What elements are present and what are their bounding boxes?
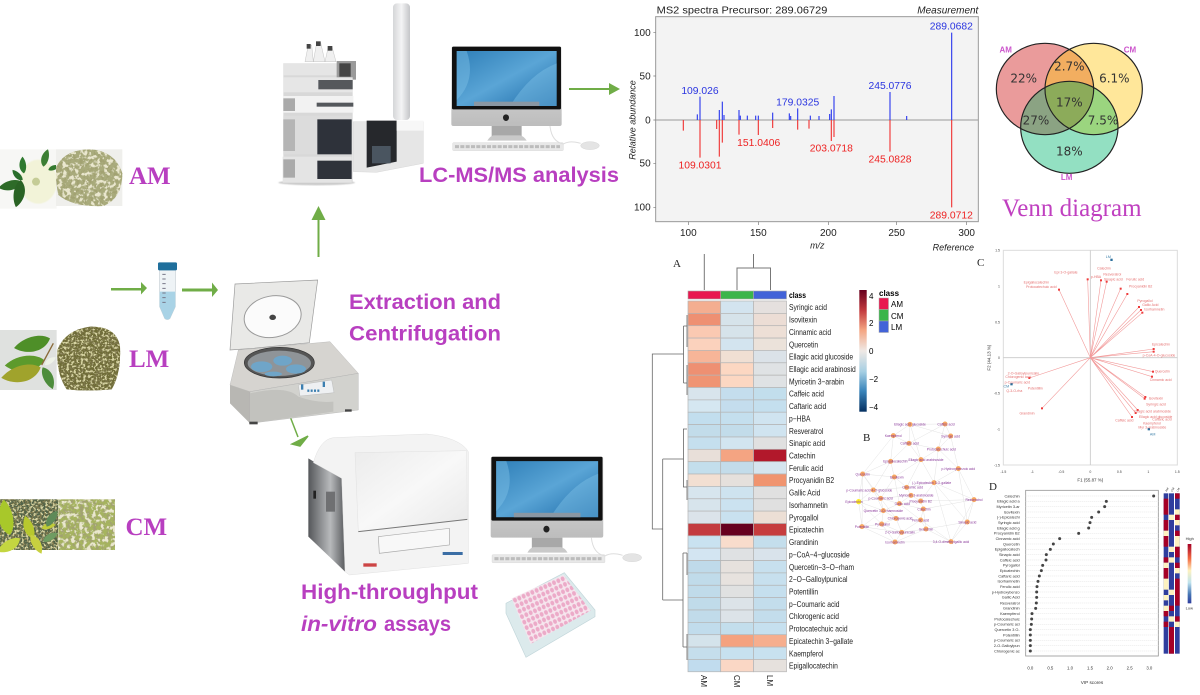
axis ticks: -1.5	[994, 463, 1000, 467]
VIP compound labels: Caftaric acid	[998, 574, 1020, 578]
y axis title: Relative abundance	[627, 80, 637, 160]
icon: 96-well plate	[506, 573, 595, 657]
network node labels: Grandinin	[919, 527, 933, 531]
network node labels: Protocatechuic acid	[927, 447, 956, 451]
axis ticks: -0.5	[994, 392, 1000, 396]
observation labels	[1003, 255, 1155, 436]
column labels	[699, 675, 774, 688]
VIP x axis labels: 2.0	[1107, 666, 1113, 671]
network node labels: Potentillin	[855, 525, 869, 529]
network node labels: Isorhamnetin	[885, 540, 905, 544]
loading labels: Quercetin	[1155, 370, 1170, 374]
heatmap cells	[688, 301, 786, 672]
axis ticks: 1.5	[995, 249, 1000, 253]
VIP compound labels: Gallic Acid	[1002, 596, 1020, 600]
network node labels: Pyrogallol	[875, 522, 890, 526]
VIP class strip	[1164, 493, 1180, 654]
network node labels: Quercetin	[855, 472, 870, 476]
VIP compound labels: Pyrogallol	[1003, 564, 1020, 568]
network node labels: Procyanidin B2	[909, 499, 932, 503]
blue peak labels: 245.0776	[868, 81, 912, 92]
red peak labels	[678, 138, 973, 221]
VIP compound labels: Kaempferol	[1000, 612, 1020, 616]
photo: LM fresh leaves	[0, 330, 58, 391]
panel label D: D	[989, 481, 997, 493]
loading labels: Isovitexin	[1149, 397, 1163, 401]
axis ticks: -0.5	[1058, 470, 1064, 474]
column labels: CM	[732, 675, 741, 688]
Venn set labels	[999, 45, 1137, 182]
compound row labels: Quercetin	[789, 340, 818, 349]
panel label B: B	[863, 432, 870, 444]
loading labels: Isorhamnetin	[1144, 308, 1164, 312]
loading labels: Resveratrol	[1103, 273, 1121, 277]
compound row labels: Catechin	[789, 451, 815, 461]
axis ticks: 0	[998, 356, 1000, 360]
compound row labels: Resveratrol	[789, 426, 824, 436]
heading: High-throughput in-vitro assays	[301, 581, 478, 636]
network node labels: Ellagic acid glucoside	[894, 423, 926, 427]
loading labels: Gallic Acid	[1142, 303, 1159, 307]
spectrum title: MS2 spectra Precursor: 289.06729	[657, 5, 828, 16]
axis ticks	[994, 249, 1180, 474]
Venn percentages: 6.1%	[1099, 71, 1130, 85]
VIP compound labels: Sinapic acid	[999, 553, 1020, 557]
column labels: LM	[765, 675, 774, 686]
network node labels: p-Coumaric acid 4-O-glucoside	[846, 488, 892, 492]
VIP compound labels: Resveratrol	[1000, 601, 1020, 605]
compound row labels: Epigallocatechin	[789, 661, 838, 671]
network node labels: Isovitexin	[890, 475, 904, 479]
Venn percentages: 18%	[1056, 144, 1083, 158]
blue peak labels: 289.0682	[930, 22, 973, 33]
network node labels: Chlorogenic acid	[888, 517, 913, 521]
loading labels: Epigallocatechin	[1024, 281, 1049, 285]
network node labels: Ellagic acid arabinoside	[909, 458, 944, 462]
axis ticks: -1	[1031, 470, 1034, 474]
network node labels: Caffeic acid	[937, 423, 955, 427]
VIP compound labels: Procyanidin B2	[994, 532, 1020, 536]
compound row labels: p−Coumaric acid	[789, 599, 840, 609]
class legend: AM	[891, 300, 903, 309]
blue peak labels: 179.0325	[776, 97, 819, 108]
network nodes	[856, 422, 976, 544]
compound row labels: Epicatechin	[789, 525, 824, 535]
VIP compound labels: Chlorogenic ac	[994, 649, 1020, 653]
compound row labels: Syringic acid	[789, 303, 827, 312]
network node labels: p-Hydroxybenzoic acid	[941, 467, 975, 471]
loading labels: Grandinin	[1019, 411, 1035, 415]
x axis tick labels: 150	[750, 228, 767, 239]
x axis tick labels: 250	[888, 228, 905, 239]
compound row labels: Caffeic acid	[789, 389, 824, 399]
panel label C: C	[977, 257, 984, 269]
VIP compound labels: Myricetin 3-ar	[996, 505, 1020, 509]
class legend: CM	[891, 312, 904, 321]
loading labels: Kaempferol	[1143, 421, 1161, 425]
y axis tick labels: 100	[634, 28, 651, 39]
icon: computer (LC-MS)	[451, 47, 599, 151]
compound row labels: Ellagic acid arabinosid	[789, 364, 856, 374]
y axis tick labels: 50	[640, 72, 651, 83]
VIP compound labels: Ferulic acid	[1000, 585, 1020, 589]
axis ticks: -1	[997, 428, 1000, 432]
photo: AM dried leaves	[56, 149, 122, 206]
compound row labels: Gallic Acid	[789, 488, 820, 498]
red peak labels: 151.0406	[737, 138, 780, 149]
VIP compound labels: (-)-Epicatechi	[997, 516, 1020, 520]
y axis tick labels: 50	[640, 159, 651, 170]
compound row labels: Procyanidin B2	[789, 476, 834, 485]
observation labels: CM	[1003, 385, 1009, 389]
chart: PCA biplot C	[986, 249, 1180, 483]
loading vectors	[1029, 279, 1154, 417]
loading labels: Ellagic acid glucoside	[1139, 415, 1172, 419]
axis ticks: -1.5	[1000, 470, 1006, 474]
heading: LC-MS/MS analysis: LC-MS/MS analysis	[419, 164, 619, 187]
compound row labels: Caftaric acid	[789, 402, 826, 411]
heading: Extraction and Centrifugation	[349, 291, 501, 346]
VIP compound labels: Epigallocatech	[995, 548, 1020, 552]
loading labels: Protocatechuic acid	[1026, 285, 1057, 289]
colour scale	[859, 290, 879, 412]
Venn set labels: AM	[999, 46, 1012, 55]
red peak labels: 289.0712	[930, 210, 973, 221]
arrow: centrifuge down to plate reader	[290, 415, 308, 446]
compound row labels: Myricetin 3−arabin	[789, 377, 844, 387]
reference label: Reference	[933, 243, 974, 253]
loading labels: Ellagic acid arabinoside	[1134, 410, 1171, 414]
compound row labels: Pyrogallol	[789, 513, 819, 522]
colour scale: −2	[869, 375, 879, 384]
panel label A: A	[673, 258, 681, 270]
arrow: computer to spectra	[569, 83, 620, 95]
column labels: AM	[699, 675, 708, 687]
chart: compound network B	[845, 422, 983, 544]
compound row labels: 2−O−Galloylpunical	[789, 575, 848, 584]
colour scale: 4	[869, 292, 874, 301]
network node labels: 3,4-O-dimethylgallic acid	[933, 540, 969, 544]
axis ticks: 1.5	[1175, 470, 1180, 474]
loading labels: Myr 3-arabinoside	[1138, 425, 1166, 429]
label: LM: LM	[129, 346, 169, 373]
VIP x axis labels: 2.5	[1127, 666, 1133, 671]
compound row labels: Quercetin−3−O−rham	[789, 562, 854, 572]
Venn percentages: 27%	[1023, 113, 1049, 127]
loading labels: Q-3-O-rha	[1006, 389, 1022, 393]
axis ticks: 0.5	[995, 320, 1000, 324]
VIP strip headers: AM	[1164, 486, 1170, 492]
sample LM: plant photos	[0, 327, 120, 391]
axis ticks: 0	[1089, 470, 1091, 474]
VIP x axis labels: 3.0	[1146, 666, 1153, 671]
network node labels	[845, 423, 983, 544]
chart: MS2 mirror spectrum	[627, 5, 980, 253]
compound row labels: Protocatechuic acid	[789, 624, 848, 634]
Venn set labels: LM	[1061, 173, 1073, 182]
network node labels: Ferulic acid	[912, 518, 929, 522]
axis titles: F1 (55.87 %)	[1077, 478, 1104, 483]
colour scale: −4	[869, 403, 879, 412]
x axis tick labels: 300	[958, 228, 975, 239]
loading labels: Epicatechin	[1152, 343, 1170, 347]
compound row labels: p−HBA	[789, 414, 811, 424]
y axis tick labels: 0	[645, 115, 651, 126]
network node labels: p-Coumaric acid	[869, 497, 893, 501]
VIP compound labels: Ellagic acid g	[997, 526, 1020, 530]
VIP compound labels: Caffeic acid	[1000, 558, 1020, 562]
heading: High-throughput in-vitro assays: in-vitro	[301, 613, 377, 636]
compound row labels	[789, 303, 856, 671]
photo: CM dried leaves	[58, 499, 115, 550]
VIP compound labels: Quercetin	[1003, 542, 1020, 546]
axis ticks: 1	[1147, 470, 1149, 474]
loading labels: Potentillin	[1028, 387, 1043, 391]
red peak labels: 109.0301	[678, 161, 722, 172]
VIP compound labels: Quercetin 3 O-	[995, 628, 1020, 632]
compound row labels: Sinapic acid	[789, 439, 825, 448]
red peak labels: 203.0718	[810, 143, 853, 154]
network node labels: Catechin	[917, 507, 931, 511]
top dendrogram	[704, 254, 770, 290]
network node labels: Gallic acid	[895, 502, 910, 506]
loading labels: Chlorogenic acid	[1005, 375, 1031, 379]
chart: heatmap A	[652, 254, 904, 688]
photo: LM dried leaves	[57, 327, 120, 390]
loading points	[1028, 278, 1155, 418]
heading: High-throughput in-vitro assays: assays	[384, 613, 451, 636]
x axis tick labels: 100	[680, 228, 697, 239]
instrument: LC-MS system	[278, 3, 423, 185]
colour scale: 0	[869, 347, 874, 356]
tall column	[393, 3, 410, 120]
compound row labels: Chlorogenic acid	[789, 612, 839, 621]
blue peak labels: 109.026	[681, 86, 719, 97]
compound row labels: Isorhamnetin	[789, 500, 828, 510]
network node labels: (-)-Epicatechin 3-O-gallate	[912, 481, 951, 485]
observation labels: LM	[1106, 255, 1111, 259]
compound row labels: p−CoA−4−glucoside	[789, 550, 850, 560]
loading labels: 2-O-Galloylpunicalin	[1008, 371, 1039, 375]
Venn percentages: 22%	[1010, 71, 1037, 85]
measurement peaks (blue)	[697, 33, 952, 120]
chart: VIP scores D	[992, 486, 1194, 685]
heading: Venn diagram: Venn diagram	[1002, 195, 1142, 222]
VIP compound labels: Isovitexin	[1004, 510, 1020, 514]
loading labels: Ferulic acid	[1126, 277, 1144, 281]
VIP x axis labels: 1.5	[1087, 666, 1094, 671]
loading labels: Cinnamic acid	[1150, 378, 1172, 382]
reference peaks (red)	[683, 120, 952, 207]
compound row labels: Isovitexin	[789, 315, 817, 325]
VIP colour key: High	[1186, 536, 1194, 541]
x axis tick labels: 200	[820, 228, 837, 239]
VIP axis title: VIP scores	[1081, 680, 1104, 685]
compound row labels: Epicatechin 3−gallate	[789, 636, 853, 646]
x axis title: m/z	[810, 240, 825, 250]
network node labels: Resveratrol	[965, 498, 983, 502]
arrow: sample to tube	[111, 282, 147, 294]
VIP compound labels: Potentillin	[1003, 633, 1020, 637]
VIP compound labels: Epicatechin	[1000, 569, 1020, 573]
network node labels: Epigallocatechin	[883, 460, 908, 464]
Venn percentages	[1010, 60, 1130, 158]
red peak labels: 245.0828	[868, 155, 912, 166]
network node labels: Kaempferol	[885, 434, 902, 438]
loading labels: p-HBA	[1091, 275, 1102, 279]
VIP compound labels: p-Coumaric aci	[994, 639, 1020, 643]
VIP colour key: Low	[1186, 606, 1193, 611]
loading labels: Catechin	[1097, 266, 1111, 270]
VIP colour key	[1186, 536, 1194, 611]
network node labels: Cinnamic acid	[902, 486, 923, 490]
loading labels: Syringic acid	[1146, 402, 1166, 406]
y axis tick labels: 100	[634, 203, 651, 214]
label: CM: CM	[126, 514, 167, 541]
class legend: LM	[891, 323, 902, 332]
x axis tick labels	[680, 228, 975, 239]
network node labels: Quercetin 3-O-rhamnoside	[864, 509, 903, 513]
blue peak labels	[681, 22, 973, 108]
loading labels: Pyrogallol	[1137, 299, 1153, 303]
VIP compound labels: Protocatechuic	[994, 617, 1020, 621]
VIP compound labels	[992, 494, 1021, 653]
class legend: class	[879, 289, 900, 298]
loading labels: Caftaric acid	[1152, 418, 1172, 422]
icon: computer (assays)	[491, 457, 642, 563]
Venn percentages: 17%	[1056, 95, 1083, 109]
measurement label: Measurement	[917, 5, 980, 16]
axis titles: F2 (44.13 %)	[986, 344, 991, 371]
loading labels: Sinapic acid	[1104, 278, 1123, 282]
VIP compound labels: Isorhamnetin	[998, 580, 1020, 584]
VIP compound labels: Catechin	[1005, 494, 1020, 498]
compound row labels: Ferulic acid	[789, 463, 823, 473]
VIP strip headers	[1164, 486, 1181, 492]
Venn percentages: 7.5%	[1088, 113, 1118, 127]
class colour bar	[688, 291, 786, 299]
colour scale: 2	[869, 319, 874, 328]
instrument: plate reader	[308, 434, 468, 575]
network node labels: Syringic acid	[941, 434, 960, 438]
axis titles	[986, 344, 1104, 483]
axis ticks: 0.5	[1117, 470, 1122, 474]
compound row labels: Cinnamic acid	[789, 327, 831, 337]
icon: centrifuge tube	[158, 262, 177, 319]
VIP compound labels: 2-O-Galloylpun	[994, 644, 1020, 648]
loading labels: p-CoA-4-O-glucoside	[1143, 353, 1175, 357]
VIP compound labels: Syringic acid	[998, 521, 1020, 525]
network node labels: Sinapic acid	[958, 520, 976, 524]
observation points	[1010, 259, 1150, 430]
loading labels	[1005, 266, 1175, 429]
photo: AM fresh flowers and leaves	[0, 148, 60, 209]
loading labels: Caffeic acid	[1115, 419, 1133, 423]
sample AM: plant photos	[0, 148, 122, 209]
VIP compound labels: p-Coumaric aci	[994, 623, 1020, 627]
compound row labels: Kaempferol	[789, 649, 824, 658]
chart: Venn diagram	[996, 43, 1142, 182]
VIP points	[1029, 494, 1155, 652]
heading: Extraction and Centrifugation: Centrifugation	[349, 322, 501, 346]
arrow: tube to centrifuge	[182, 282, 218, 297]
VIP strip headers: CM	[1170, 486, 1176, 492]
class bar label: class	[789, 290, 806, 300]
heading: High-throughput in-vitro assays: High-throughput	[301, 581, 478, 604]
mass spectrometer box	[353, 121, 423, 172]
network node labels: 2-O-Galloylpunicalin	[885, 531, 915, 535]
Venn set labels: CM	[1124, 45, 1137, 54]
VIP compound labels: p-Hydroxybenzo	[992, 590, 1020, 594]
VIP strip headers: LM	[1175, 487, 1181, 492]
loading labels: Epi 3-O-gallate	[1054, 270, 1078, 274]
instrument: centrifuge	[230, 280, 358, 424]
VIP x axis labels: 0.0	[1027, 666, 1034, 671]
network node labels: Epicatechin	[845, 500, 863, 504]
y axis tick labels	[634, 28, 651, 214]
VIP compound labels: Grandinin	[1003, 607, 1020, 611]
VIP compound labels: Ellagic acid a	[997, 500, 1021, 504]
VIP x axis labels: 0.5	[1047, 666, 1054, 671]
arrow: centrifuge up to LC-MS	[312, 206, 326, 257]
compound row labels: Grandinin	[789, 537, 818, 547]
LC module stack	[283, 41, 356, 183]
VIP x axis labels: 1.0	[1067, 666, 1074, 671]
sample CM: plant photos	[0, 499, 115, 557]
observation labels: AM	[1150, 432, 1155, 436]
loading labels: Procyanidin B2	[1129, 285, 1152, 289]
left dendrogram	[652, 315, 687, 660]
VIP x axis labels	[1027, 666, 1153, 671]
compound row labels: Ellagic acid glucoside	[789, 352, 853, 362]
heading: Extraction and Centrifugation: Extraction and	[349, 291, 501, 314]
loading labels: p-Coumaric acid	[1005, 380, 1030, 384]
axis ticks: 1	[998, 285, 1000, 289]
Venn percentages: 2.7%	[1054, 60, 1085, 74]
compound row labels: Potentillin	[789, 587, 818, 597]
label: AM: AM	[129, 163, 171, 190]
network node labels: Myricetin 3-arabinoside	[899, 494, 934, 498]
class legend	[879, 289, 904, 332]
VIP compound labels: Cinnamic acid	[996, 537, 1020, 541]
photo: CM fresh leaves	[0, 499, 60, 557]
network node labels: Caftaric acid	[900, 442, 919, 446]
